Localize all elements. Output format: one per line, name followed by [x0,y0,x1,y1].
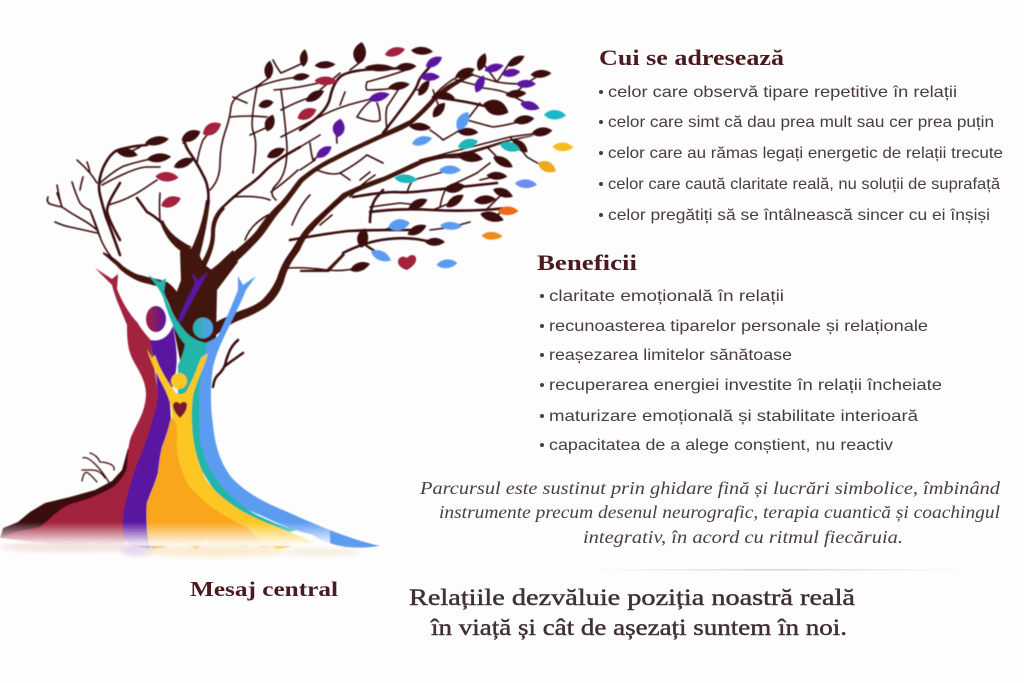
item: claritate emoțională în relații [549,288,784,305]
figure: crimson [0,268,158,546]
item: celor care observă tipare repetitive în relații [608,84,957,101]
central message: Relațiile dezvăluie poziția noastră reală [409,585,855,610]
label: Mesaj central: Mesaj central [190,577,338,601]
figure: teal [148,275,297,535]
item: celor care au rămas legați energetic de relații trecute [608,145,1003,162]
figure: yellow robe with raised arms [147,349,315,552]
leaves [115,41,574,274]
text block: method paragraph: Parcursul este sustinut prin ghidare fină și lucrări simbolice, îmbinând [419,478,1001,498]
fine branches [47,60,547,271]
list: benefits [540,288,942,454]
central message: în viață și cât de așezați suntem în noi. [430,615,847,640]
text block: method paragraph: integrativ, în acord cu ritmul fiecăruia. [583,527,903,547]
tree branches [0,60,547,540]
text block: method paragraph: instrumente precum desenul neurografic, terapia cuantică și coachingul [439,502,1000,522]
list: target audience [599,84,1003,224]
figure: purple raised arm [178,272,208,322]
icon: falling heart leaf [398,255,416,270]
item: reașezarea limitelor sănătoase [549,347,792,364]
figure heads [146,306,213,389]
illustration: tree with four figures [0,41,574,580]
item: celor pregătiți să se întâlnească sincer cu ei înșiși [608,207,990,224]
icon: heart [173,402,187,418]
item: maturizare emoțională și stabilitate interioară [549,408,918,425]
right side branch [213,340,243,387]
item: capacitatea de a alege conștient, nu reactiv [549,437,893,454]
crimson leaves [155,45,406,210]
heading: Cui se adresează: Cui se adresează [599,45,784,70]
figure: purple body [122,326,177,552]
teal leaves [394,110,566,184]
item: recunoasterea tiparelor personale și relaționale [549,318,928,335]
dark ground root [0,448,134,540]
central message [409,585,855,640]
item: celor care caută claritate reală, nu soluții de suprafață [608,176,1000,193]
text block: method paragraph [419,478,1001,547]
purple leaves [314,53,541,161]
dark leaves [115,41,553,274]
figure: blue [197,276,380,548]
trunk and thick limbs [103,73,533,400]
main branches [99,63,507,255]
item: recuperarea energiei investite în relații încheiate [549,377,942,394]
heading: Beneficii: Beneficii [537,250,637,275]
paint wash at the base [0,522,360,580]
figure: orange robe [147,418,265,552]
small dead twigs at the trunk foot [82,453,114,484]
item: celor care simt că dau prea mult sau cer prea puțin [608,114,994,131]
yellow and orange leaves [481,142,574,240]
blue leaves [369,109,537,269]
